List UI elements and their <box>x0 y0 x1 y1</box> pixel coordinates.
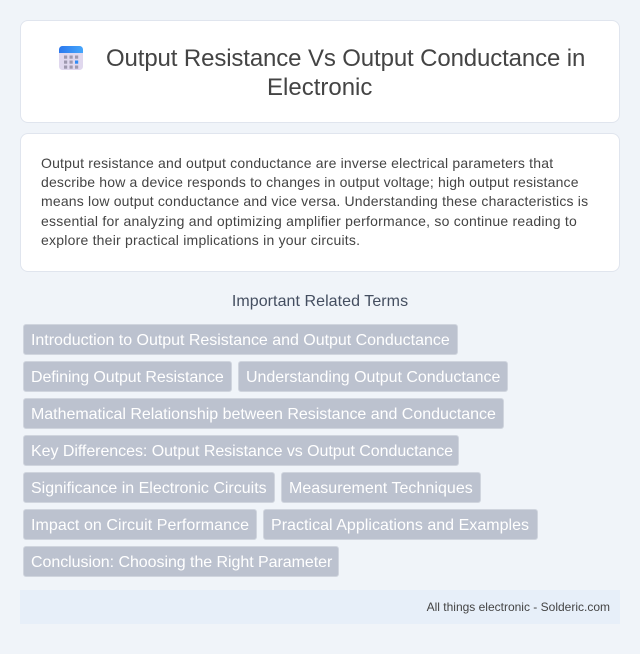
tag: Defining Output Resistance <box>31 368 224 386</box>
tag <box>23 509 257 540</box>
panel: summary card <box>20 133 620 272</box>
tag <box>23 546 339 577</box>
title line 1: Output Resistance Vs Output Conductance in <box>106 45 585 72</box>
tag <box>263 509 538 540</box>
summary text: explore their practical implications in your circuits. <box>41 232 360 248</box>
tag: Introduction to Output Resistance and Output Conductance <box>31 332 450 348</box>
tag <box>238 361 508 392</box>
icon: calendar grid <box>59 46 83 70</box>
tag <box>23 398 504 429</box>
tag <box>23 324 458 355</box>
tag list <box>23 324 538 577</box>
summary text: describe how a device responds to changes in output voltage; high output resistance <box>41 174 579 190</box>
tag <box>23 435 459 466</box>
tag: Key Differences: Output Resistance vs Output Conductance <box>31 442 453 460</box>
tag: Mathematical Relationship between Resistance and Conductance <box>31 406 496 422</box>
tag: Understanding Output Conductance <box>246 368 500 386</box>
footer bar <box>20 590 620 624</box>
tag: Practical Applications and Examples <box>271 516 529 534</box>
tag <box>23 361 232 392</box>
tag: Impact on Circuit Performance <box>31 516 249 534</box>
tag <box>23 472 275 503</box>
tag: Conclusion: Choosing the Right Parameter <box>31 554 332 570</box>
title line 2: Electronic <box>267 74 372 101</box>
summary text: means low output conductance and vice versa. Understanding these characteristics is <box>41 193 588 209</box>
summary text: essential for analyzing and optimizing amplifier performance, so continue reading to <box>41 213 577 229</box>
tag <box>281 472 481 503</box>
tag: Measurement Techniques <box>289 480 473 496</box>
heading: important related terms: Important Related Terms <box>232 293 408 310</box>
panel: title card <box>20 20 620 123</box>
footer credit: All things electronic - Solderic.com <box>427 600 610 614</box>
summary text <box>41 155 588 248</box>
summary text: Output resistance and output conductance are inverse electrical parameters that <box>41 155 553 171</box>
tag: Significance in Electronic Circuits <box>31 480 267 496</box>
